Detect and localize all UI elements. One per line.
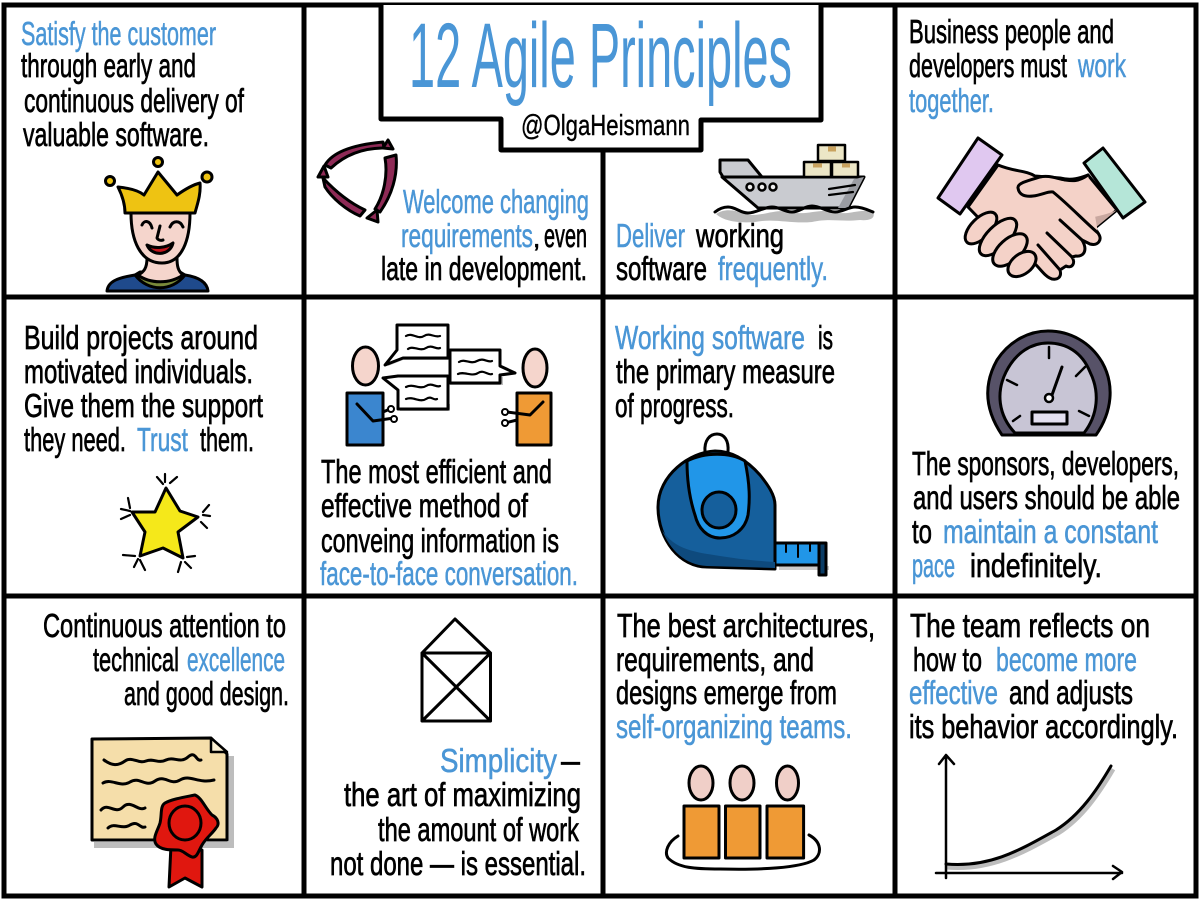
- text: best architectures: self-organizing teams.: [616, 708, 852, 745]
- text: working software measure of progress: [615, 319, 835, 424]
- icon: envelope house: [422, 619, 490, 721]
- title: 12 Agile Principles: [409, 5, 792, 107]
- text: build projects around motivated individuals: Trust: [137, 421, 188, 458]
- text: sponsors developers users: pace: [912, 547, 955, 584]
- text: deliver working software frequently: frequently.: [718, 250, 828, 287]
- text: working software measure of progress: the primary measure: [616, 353, 835, 390]
- panel: team reflects: [909, 607, 1178, 879]
- panel: face-to-face conversation: [320, 325, 578, 592]
- icon: handshake: [938, 138, 1145, 282]
- text: deliver working software frequently: working: [695, 217, 784, 254]
- icon: three team members at table: [666, 766, 819, 869]
- panel: constant pace: [912, 331, 1180, 584]
- text: continuous attention: [43, 607, 289, 712]
- text: simplicity: not done — is essential.: [330, 845, 586, 882]
- text: simplicity: Simplicity: [440, 742, 557, 779]
- panel: satisfy the customer: [21, 15, 245, 291]
- text: satisfy the customer: through early and: [21, 47, 196, 84]
- text: sponsors developers users: indefinitely.: [970, 547, 1102, 584]
- panel: technical excellence: [43, 607, 289, 887]
- text: continuous attention: technical: [93, 641, 179, 678]
- text: team reflects: and adjusts: [1009, 674, 1133, 711]
- author handle: @OlgaHeismann: [521, 110, 690, 142]
- text: deliver working software frequently: software: [616, 250, 707, 287]
- text: build projects around motivated individuals: [24, 319, 263, 458]
- panel: working software: [615, 319, 835, 575]
- text: team reflects: effective: [909, 674, 998, 711]
- text: welcome changing requirements: Welcome changing: [403, 183, 589, 220]
- text: most efficient method: face-to-face conversation.: [320, 555, 578, 592]
- text: best architectures: The best architectures,: [617, 607, 875, 644]
- text: satisfy the customer: [21, 15, 245, 153]
- text: team reflects: [909, 607, 1178, 745]
- panel: deliver frequently: [616, 145, 874, 287]
- icon: cycle arrows: [318, 140, 396, 222]
- text: sponsors developers users: [912, 445, 1180, 584]
- text: working software measure of progress: is: [818, 319, 833, 356]
- text: best architectures: requirements, and: [616, 641, 814, 678]
- text: simplicity: —: [561, 742, 580, 779]
- text: build projects around motivated individuals: motivated individuals.: [24, 353, 253, 390]
- text: welcome changing requirements: ,: [533, 223, 540, 253]
- text: continuous attention: excellence: [187, 641, 285, 678]
- panel: title: [381, 5, 821, 150]
- panel: welcome changing requirements: [318, 140, 589, 287]
- icon: star: [121, 474, 210, 572]
- text: build projects around motivated individuals: them.: [200, 421, 254, 458]
- panel: self-organizing teams: [616, 607, 875, 869]
- text: business people and developers: work: [1077, 47, 1126, 84]
- text: business people and developers: together.: [909, 82, 994, 119]
- text: deliver working software frequently: [616, 217, 828, 287]
- text: continuous attention: Continuous attention to: [43, 607, 286, 644]
- text: continuous attention: and good design.: [124, 675, 289, 712]
- text: build projects around motivated individuals: Build projects around: [24, 319, 258, 356]
- text: most efficient method: The most efficient and: [321, 453, 552, 490]
- panel: work together: [909, 13, 1145, 282]
- text: build projects around motivated individuals: Give them the support: [24, 387, 263, 424]
- text: sponsors developers users: to: [912, 513, 932, 550]
- text: most efficient method: conveing information is: [321, 522, 559, 559]
- text: welcome changing requirements: late in development.: [381, 250, 587, 287]
- text: simplicity: [330, 742, 586, 882]
- icon: certificate with seal: [92, 738, 234, 887]
- panel: simplicity: [330, 619, 586, 882]
- text: most efficient method: effective method of: [321, 487, 529, 524]
- text: welcome changing requirements: [381, 183, 589, 287]
- text: most efficient method: [320, 453, 578, 592]
- text: satisfy the customer: Satisfy the customer: [21, 15, 216, 52]
- icon: two people talking: [347, 325, 551, 445]
- text: satisfy the customer: continuous delivery of: [24, 82, 245, 119]
- text: simplicity: the art of maximizing: [344, 776, 581, 813]
- text: deliver working software frequently: Deliver: [616, 217, 685, 254]
- icon: crowned customer: [106, 158, 212, 291]
- text: build projects around motivated individuals: they need.: [24, 421, 126, 458]
- text: satisfy the customer: valuable software.: [23, 116, 209, 153]
- text: team reflects: become more: [996, 641, 1137, 678]
- text: business people and developers: developers must: [909, 47, 1067, 84]
- text: team reflects: how to: [913, 641, 982, 678]
- text: welcome changing requirements: even: [544, 217, 587, 254]
- icon: speedometer: [988, 331, 1110, 435]
- text: best architectures: designs emerge from: [616, 674, 837, 711]
- icon: cargo ship: [715, 145, 874, 222]
- panel: motivated individuals: [24, 319, 263, 572]
- title box: [381, 5, 821, 150]
- icon: tape measure: [658, 434, 829, 575]
- text: business people and developers: [909, 13, 1126, 119]
- text: best architectures: [616, 607, 875, 745]
- text: simplicity: the amount of work: [378, 811, 579, 848]
- chart: rising curve: [936, 755, 1122, 879]
- text: working software measure of progress: of progress.: [615, 387, 734, 424]
- text: welcome changing requirements: requirements: [401, 217, 533, 254]
- text: working software measure of progress: Working software: [615, 319, 805, 356]
